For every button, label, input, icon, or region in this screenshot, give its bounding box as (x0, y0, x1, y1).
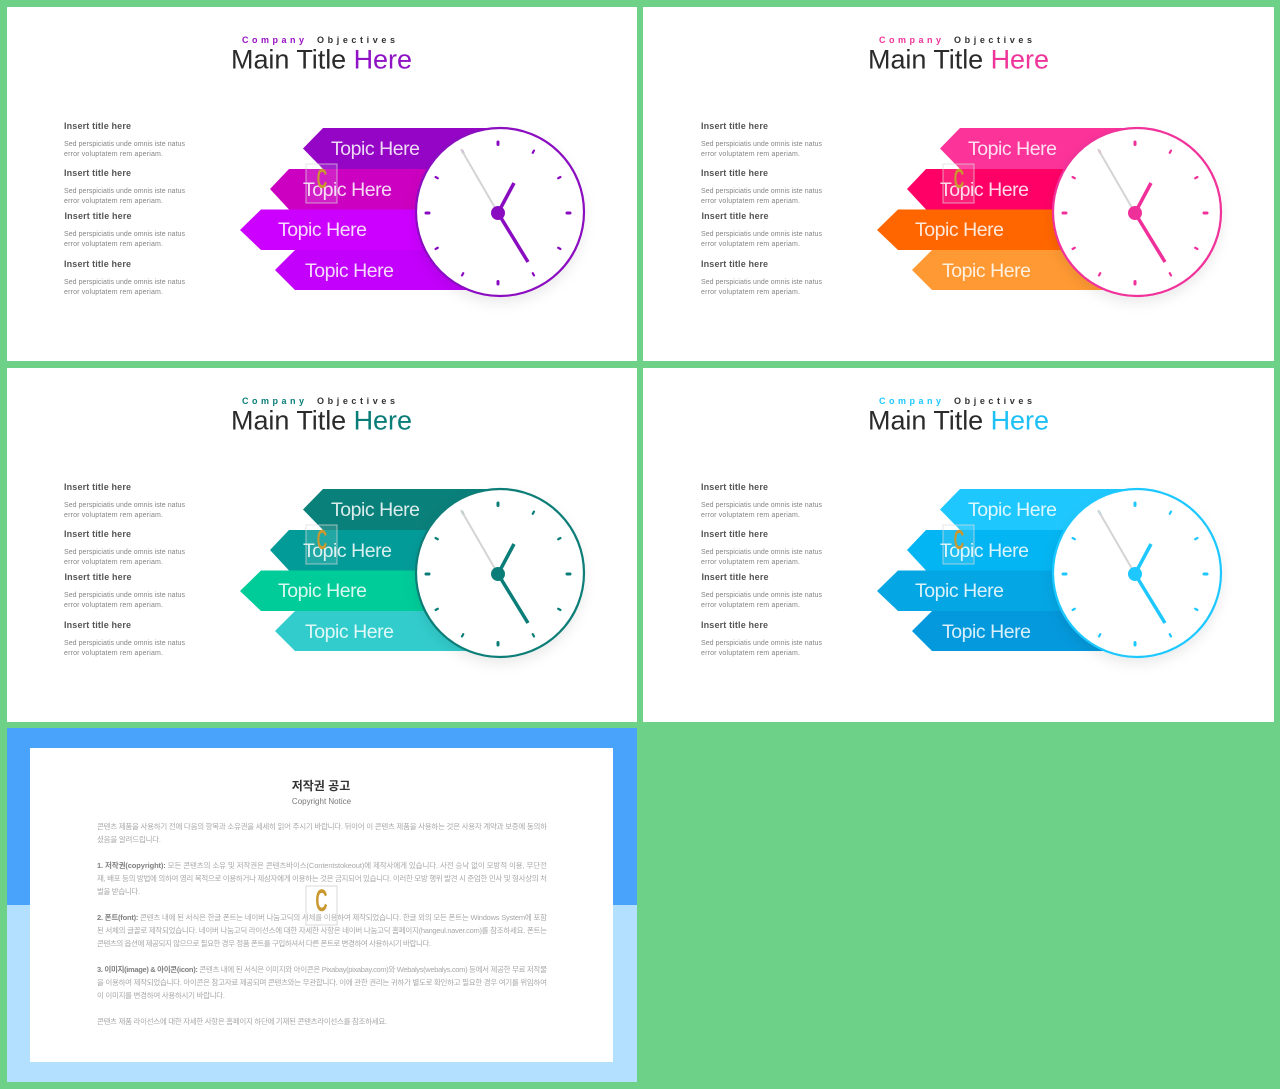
arrow banners: Topic Here (942, 621, 1031, 643)
text block: list of four items: Insert title here (64, 482, 131, 492)
arrow banners (877, 489, 1137, 651)
title: Main Title Here (231, 44, 412, 74)
arrow banners: Topic Here (915, 580, 1004, 602)
arrow banners (240, 128, 500, 290)
text block: list of four items: Insert title here (701, 482, 768, 492)
watermark logo: C (954, 524, 964, 555)
text block: list of four items: error voluptatem rem aperiam. (701, 151, 800, 158)
watermark logo: C (317, 163, 327, 194)
eyebrow: company objectives (242, 35, 395, 45)
arrow banners: Topic Here (331, 138, 420, 160)
watermark logo: C (315, 884, 328, 918)
notice section: image and icon: 3. 이미지(image) & 아이콘(icon): 콘텐츠 내에 된 서식은 이미지와 아이콘은 Pixabay(pixabay.com)와 Webalys(webalys.com) 등에서 제공한 무료 저작물 (97, 964, 547, 974)
notice heading: 저작권 공고 (292, 778, 350, 793)
text block: list of four items: Insert title here (64, 620, 131, 630)
notice section: image and icon: 을 이용하여 제작되었습니다. 아이콘은 참고자료 제공되며 콘텐츠와는 무관합니다. 이에 관한 권리는 귀하가 별도로 확인하고 필요한 경우 여기를 위임하여 (97, 977, 547, 987)
eyebrow: company objectives: Objectives (954, 396, 1032, 406)
text block: list of four items: Sed perspiciatis unde omnis iste natus (701, 279, 822, 286)
eyebrow: company objectives (879, 396, 1032, 406)
eyebrow: company objectives: Objectives (954, 35, 1032, 45)
eyebrow: company objectives: Company (879, 35, 941, 45)
arrow banners: Topic Here (303, 179, 392, 201)
text block: list of four items: Insert title here (701, 168, 768, 178)
notice section: font: 콘텐츠의 옵션에 제공되지 않으므로 필요한 경우 정품 폰트를 구입하셔서 다른 폰트로 변경하여 사용하시기 바랍니다. (97, 938, 431, 948)
eyebrow: company objectives (242, 396, 395, 406)
arrow banners: Topic Here (940, 540, 1029, 562)
text block: list of four items: error voluptatem rem aperiam. (64, 289, 163, 296)
text block: list of four items: Insert title here (64, 168, 131, 178)
title: Main Title Here (231, 406, 412, 436)
text block: list of four items: Insert title here (702, 572, 768, 582)
eyebrow: company objectives: Objectives (317, 35, 395, 45)
text block: list of four items: error voluptatem rem aperiam. (701, 512, 800, 519)
panel: blue slide (643, 368, 1274, 722)
notice section: copyright (97, 860, 547, 896)
watermark logo (943, 524, 974, 564)
clock (1053, 489, 1221, 657)
arrow banners: Topic Here (968, 138, 1057, 160)
text block: list of four items: Sed perspiciatis unde omnis iste natus (64, 188, 186, 195)
text block: list of four items: Sed perspiciatis unde omnis iste natus (701, 141, 822, 148)
text block: list of four items: error voluptatem rem aperiam. (701, 289, 800, 296)
text block: list of four items: Sed perspiciatis unde omnis iste natus (64, 141, 186, 148)
text block: list of four items: error voluptatem rem aperiam. (64, 151, 163, 158)
watermark logo (306, 163, 337, 203)
text block: list of four items: Insert title here (701, 121, 768, 131)
text block: list of four items: Sed perspiciatis unde omnis iste natus (64, 640, 186, 647)
arrow banners: Topic Here (968, 499, 1057, 521)
clock (416, 128, 584, 296)
notice section: font: 된 서체의 글꼴로 제작되었습니다. 네이버 나눔고딕 라이선스에 대한 자세한 사항은 네이버 나눔고딕 홈페이지(hangeul.naver.com)를 참조하세요. 폰트는 (97, 925, 547, 935)
watermark logo: C (954, 163, 964, 194)
arrow banners: Topic Here (305, 621, 394, 643)
arrow banners: Topic Here (915, 219, 1004, 241)
text block: list of four items: error voluptatem rem aperiam. (64, 602, 163, 609)
text block: list of four items: Sed perspiciatis unde omnis iste natus (701, 188, 822, 195)
arrow banners: Topic Here (278, 219, 367, 241)
panel: teal slide (7, 368, 637, 722)
text block: list of four items: Insert title here (702, 211, 768, 221)
text block: list of four items: Sed perspiciatis unde omnis iste natus (64, 502, 186, 509)
text block: list of four items (64, 121, 186, 296)
arrow banners: Topic Here (331, 499, 420, 521)
text block: list of four items: error voluptatem rem aperiam. (64, 198, 163, 205)
title: Main Title Here (868, 44, 1049, 74)
text block: list of four items: Sed perspiciatis unde omnis iste natus (701, 502, 822, 509)
arrow banners: Topic Here (940, 179, 1029, 201)
arrow banners (240, 489, 500, 651)
clock (1053, 128, 1221, 296)
text block: list of four items: Insert title here (64, 259, 131, 269)
title: Main Title Here (868, 406, 1049, 436)
text block: list of four items: Sed perspiciatis unde omnis iste natus (64, 279, 186, 286)
text block: list of four items: error voluptatem rem aperiam. (64, 512, 163, 519)
panel: copyright notice (7, 728, 637, 1082)
notice section: copyright: 재, 배포 등의 방법에 의하여 영리 목적으로 이용하거나 제삼자에게 이용하는 것은 금지되어 있습니다. 이러한 모방 행위 발견 시 준엄한 민사 및 형사상의 처 (97, 873, 547, 883)
eyebrow: company objectives: Objectives (317, 396, 395, 406)
notice intro (97, 821, 547, 844)
text block: list of four items: error voluptatem rem aperiam. (64, 650, 163, 657)
notice section: image and icon: 이 이미지를 변경하여 사용하시기 바랍니다. (97, 990, 225, 1000)
text block: list of four items: Sed perspiciatis unde omnis iste natus (701, 592, 822, 599)
notice footer: 콘텐츠 제품 라이선스에 대한 자세한 사항은 홈페이지 하단에 기재된 콘텐츠라이선스를 참조하세요. (97, 1016, 387, 1026)
text block: list of four items (701, 121, 822, 296)
clock (416, 489, 584, 657)
text block: list of four items: Insert title here (701, 529, 768, 539)
text block: list of four items: error voluptatem rem aperiam. (64, 241, 163, 248)
text block: list of four items: Insert title here (64, 572, 132, 582)
text block: list of four items: error voluptatem rem aperiam. (701, 241, 800, 248)
text block: list of four items: Insert title here (64, 529, 131, 539)
text block: list of four items: error voluptatem rem aperiam. (701, 602, 800, 609)
arrow banners: Topic Here (942, 260, 1031, 282)
eyebrow: company objectives (879, 35, 1032, 45)
eyebrow: company objectives: Company (879, 396, 941, 406)
text block: list of four items: Insert title here (64, 211, 132, 221)
watermark logo (943, 163, 974, 203)
text block: list of four items (701, 482, 822, 657)
eyebrow: company objectives: Company (242, 35, 304, 45)
text block: list of four items: Sed perspiciatis unde omnis iste natus (64, 549, 186, 556)
watermark logo: C (317, 524, 327, 555)
arrow banners: Topic Here (278, 580, 367, 602)
text block: list of four items: error voluptatem rem aperiam. (701, 198, 800, 205)
text block: list of four items: Insert title here (701, 259, 768, 269)
text block: list of four items (64, 482, 186, 657)
arrow banners: Topic Here (303, 540, 392, 562)
text block: list of four items: Sed perspiciatis unde omnis iste natus (701, 231, 822, 238)
watermark logo (306, 524, 337, 564)
text block: list of four items: Sed perspiciatis unde omnis iste natus (701, 549, 822, 556)
watermark logo (306, 884, 337, 925)
notice section: font (97, 912, 547, 948)
text block: list of four items: error voluptatem rem aperiam. (701, 559, 800, 566)
eyebrow: company objectives: Company (242, 396, 304, 406)
text block: list of four items: Insert title here (64, 121, 131, 131)
notice section: font: 2. 폰트(font): 콘텐츠 내에 된 서식은 한글 폰트는 네이버 나눔고딕의 서체를 이용하여 제작되었습니다. 한글 외의 모든 폰트는 Windows System에 포함 (97, 912, 547, 922)
notice intro: 셨음을 알려드립니다. (97, 834, 161, 844)
panel: purple slide (7, 7, 637, 361)
notice section: copyright: 벌을 받습니다. (97, 886, 140, 896)
text block: list of four items: Insert title here (701, 620, 768, 630)
notice subheading: Copyright Notice (292, 797, 352, 806)
notice section: copyright: 1. 저작권(copyright): 모든 콘텐츠의 소유 및 저작권은 콘텐츠바이스(Contentstokeout)에 제작사에게 있습니다. 사전 승낙 없이 모방적 이용, 무단전 (97, 860, 547, 870)
panel: pink and orange slide (643, 7, 1274, 361)
text block: list of four items: Sed perspiciatis unde omnis iste natus (701, 640, 822, 647)
text block: list of four items: Sed perspiciatis unde omnis iste natus (64, 231, 186, 238)
text block: list of four items: Sed perspiciatis unde omnis iste natus (64, 592, 186, 599)
notice intro: 콘텐츠 제품을 사용하기 전에 다음의 항목과 소유권을 세세히 읽어 주시기 바랍니다. 뒤이어 이 콘텐츠 제품을 사용하는 것은 사용자 계약과 보증에 동의하 (97, 821, 547, 831)
notice section: image and icon (97, 964, 547, 1000)
arrow banners (877, 128, 1137, 290)
text block: list of four items: error voluptatem rem aperiam. (64, 559, 163, 566)
arrow banners: Topic Here (305, 260, 394, 282)
text block: list of four items: error voluptatem rem aperiam. (701, 650, 800, 657)
